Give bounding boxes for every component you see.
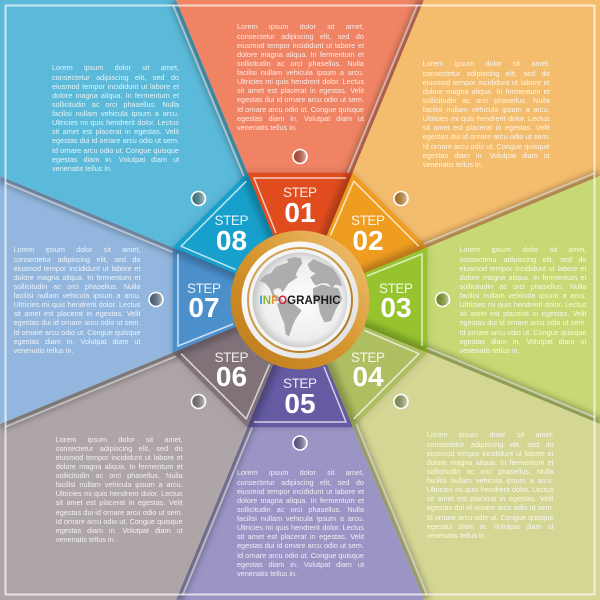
panel: bottom wedge text panel: [176, 364, 424, 600]
panel: bottom wedge text panel: Lorem ipsum dolor sit amet,: [237, 468, 364, 477]
panel: upper right wedge text panel: Ultricies mi quis hendrerit dolor. Lectus: [423, 114, 550, 123]
panel: right wedge text panel: Id ornare arcu odio ut. Congue quisque: [460, 328, 586, 337]
panel: left wedge text panel: consectetur adipiscing elit, sed do: [14, 255, 140, 264]
panel: upper left wedge text panel: sollicitudin ac orci phasellus. Nulla: [52, 100, 179, 109]
step 02 wedge: [326, 172, 428, 274]
panel: lower left wedge text panel: egestas diam in. Volutpat diam ut: [56, 526, 183, 535]
panel: lower right wedge text panel: Ultricies mi quis hendrerit dolor. Lectus: [427, 485, 554, 494]
panel: upper left wedge text panel: Ultricies mi quis hendrerit dolor. Lectus: [52, 118, 179, 127]
panel: lower left wedge text panel: eiusmod tempor incididunt ut labore et: [56, 453, 183, 462]
panel: lower right wedge text panel: venenatis tellus in.: [427, 531, 487, 540]
panel: top wedge text panel: [176, 0, 424, 236]
panel: lower right wedge text panel: egestas dui id ornare arcu odio ut sem.: [427, 503, 554, 512]
step 01 wedge: [247, 172, 353, 236]
panel: lower left wedge text panel: dolore magna aliqua. In fermentum et: [56, 462, 183, 471]
dot: step 01: [293, 150, 307, 164]
panel: left wedge text panel: sit amet est placerat in egestas. Velit: [14, 309, 140, 318]
panel: bottom wedge text panel: facilisi nullam vehicula ipsum a arcu.: [237, 514, 364, 523]
central globe badge: [230, 230, 370, 370]
step 05 wedge: STEP: [283, 376, 317, 391]
panel: lower left wedge text panel: sollicitudin ac orci phasellus. Nulla: [56, 471, 183, 480]
step 04 wedge: [326, 326, 427, 427]
panel: left wedge text panel: dolore magna aliqua. In fermentum et: [14, 273, 140, 282]
panel: top wedge text panel: sit amet est placerat in egestas. Velit: [237, 86, 364, 95]
step 02 wedge: STEP: [351, 213, 385, 228]
panel: right wedge text panel: sollicitudin ac orci phasellus. Nulla: [460, 282, 586, 291]
panel: right wedge text panel: sit amet est placerat in egestas. Velit: [460, 309, 586, 318]
panel: bottom wedge text panel: sit amet est placerat in egestas. Velit: [237, 532, 364, 541]
step 01 wedge: STEP: [283, 185, 317, 200]
connector dots: [149, 150, 450, 450]
panel: left wedge text panel: eiusmod tempor incididunt ut labore et: [14, 264, 140, 273]
step 07 wedge: [172, 247, 236, 353]
panel: upper left wedge text panel: egestas diam in. Volutpat diam ut: [52, 155, 179, 164]
panel: left wedge text panel: Ultricies mi quis hendrerit dolor. Lectus: [14, 300, 140, 309]
dot: step 04: [394, 394, 408, 408]
step 07 wedge: STEP: [187, 281, 221, 296]
panel: lower right wedge text panel: facilisi nullam vehicula ipsum a arcu.: [427, 476, 554, 485]
panel: lower left wedge text panel: facilisi nullam vehicula ipsum a arcu.: [56, 480, 183, 489]
panel: lower right wedge text panel: sit amet est placerat in egestas. Velit: [427, 494, 554, 503]
panel: left wedge text panel: venenatis tellus in.: [14, 346, 74, 355]
dot: step 07: [149, 292, 163, 306]
panel: lower right wedge text panel: Id ornare arcu odio ut. Congue quisque: [427, 513, 554, 522]
panel: left wedge text panel: facilisi nullam vehicula ipsum a arcu.: [14, 291, 140, 300]
panel: right wedge text panel: consectetur adipiscing elit, sed do: [460, 255, 586, 264]
step 07 wedge: 07: [188, 292, 220, 323]
step 06 wedge: [174, 326, 274, 427]
panel: upper left wedge text panel: consectetur adipiscing elit, sed do: [52, 73, 179, 82]
panel: lower right wedge text panel: dolore magna aliqua. In fermentum et: [427, 458, 554, 467]
panel: upper right wedge text panel: Id ornare arcu odio ut. Congue quisque: [423, 142, 550, 151]
panel: lower left wedge text panel: sit amet est placerat in egestas. Velit: [56, 498, 183, 507]
panel: lower left wedge text panel: Lorem ipsum dolor sit amet,: [56, 434, 183, 444]
step 08 wedge: STEP: [214, 213, 248, 228]
step 04 wedge: 04: [352, 361, 384, 392]
dot: step 08: [192, 192, 206, 206]
panel: top wedge text panel: egestas diam in. Volutpat diam ut: [237, 114, 364, 123]
panel: lower left wedge text panel: Id ornare arcu odio ut. Congue quisque: [56, 517, 183, 526]
panel: top wedge text panel: Id ornare arcu odio ut. Congue quisque: [237, 105, 364, 114]
panel: upper right wedge text panel: facilisi nullam vehicula ipsum a arcu.: [423, 105, 550, 114]
panel: upper right wedge text panel: eiusmod tempor incididunt ut labore et: [423, 78, 550, 87]
dot: step 06: [192, 394, 206, 408]
panel: upper left wedge text panel: Id ornare arcu odio ut. Congue quisque: [52, 146, 179, 155]
panel: right wedge text panel: dolore magna aliqua. In fermentum et: [460, 273, 586, 282]
panel: right wedge text panel: egestas diam in. Volutpat diam ut: [460, 337, 586, 346]
panel: top wedge text panel: venenatis tellus in.: [237, 123, 297, 132]
panel: right wedge text panel: eiusmod tempor incididunt ut labore et: [460, 264, 586, 273]
panel: upper right wedge text panel: egestas dui id ornare arcu odio ut sem.: [423, 132, 550, 141]
panel: left wedge text panel: Id ornare arcu odio ut. Congue quisque: [14, 328, 140, 337]
panel: right wedge text panel: Ultricies mi quis hendrerit dolor. Lectus: [460, 300, 586, 309]
panel: left wedge text panel: egestas diam in. Volutpat diam ut: [14, 337, 140, 346]
panel: lower left wedge text panel: venenatis tellus in.: [56, 535, 116, 544]
panel: right wedge text panel: venenatis tellus in.: [460, 346, 520, 355]
badge title: INFOGRAPHIC: [260, 295, 340, 307]
step 01 wedge: 01: [284, 197, 316, 228]
panel: bottom wedge text panel: eiusmod tempor incididunt ut labore et: [237, 487, 364, 496]
panel: lower right wedge text panel: consectetur adipiscing elit, sed do: [427, 440, 554, 449]
panel: upper right wedge text panel: egestas diam in. Volutpat diam ut: [423, 151, 550, 160]
step 05 wedge: [247, 364, 353, 428]
panel: bottom wedge text panel: venenatis tellus in.: [237, 569, 297, 578]
step 03 wedge: STEP: [379, 281, 413, 296]
panel: bottom wedge text panel: Id ornare arcu odio ut. Congue quisque: [237, 551, 364, 560]
panel: top wedge text panel: Lorem ipsum dolor sit amet,: [237, 22, 364, 31]
panel: bottom wedge text panel: egestas diam in. Volutpat diam ut: [237, 560, 364, 569]
panel: top wedge text panel: eiusmod tempor incididunt ut labore et: [237, 41, 364, 50]
panel: upper left wedge text panel: [0, 0, 274, 274]
panel: left wedge text panel: [0, 176, 236, 424]
panel: upper right wedge text panel: venenatis tellus in.: [423, 160, 483, 169]
panel: right wedge text panel: facilisi nullam vehicula ipsum a arcu.: [460, 291, 586, 300]
panel: upper left wedge text panel: eiusmod tempor incididunt ut labore et: [52, 82, 179, 91]
panel: left wedge text panel: egestas dui id ornare arcu odio ut sem.: [14, 318, 140, 327]
panel: right wedge text panel: Lorem ipsum dolor sit amet,: [460, 245, 586, 254]
dot: step 05: [293, 436, 307, 450]
step 03 wedge: 03: [380, 292, 412, 323]
panel: lower right wedge text panel: Lorem ipsum dolor sit amet,: [427, 430, 554, 439]
panel: upper right wedge text panel: consectetur adipiscing elit, sed do: [423, 69, 550, 78]
panel: bottom wedge text panel: dolore magna aliqua. In fermentum et: [237, 496, 364, 505]
panel: left wedge text panel: sollicitudin ac orci phasellus. Nulla: [14, 282, 140, 291]
panel: lower left wedge text panel: consectetur adipiscing elit, sed do: [56, 444, 183, 453]
panel: bottom wedge text panel: consectetur adipiscing elit, sed do: [237, 478, 364, 487]
panel: right wedge text panel: egestas dui id ornare arcu odio ut sem.: [460, 318, 586, 327]
panel: lower left wedge text panel: [0, 327, 272, 600]
panel: upper right wedge text panel: sollicitudin ac orci phasellus. Nulla: [423, 96, 550, 105]
panel: bottom wedge text panel: Ultricies mi quis hendrerit dolor. Lectus: [237, 523, 364, 532]
panel: upper left wedge text panel: venenatis tellus in.: [52, 164, 112, 173]
panel: top wedge text panel: facilisi nullam vehicula ipsum a arcu.: [237, 68, 364, 77]
step 03 wedge: [364, 247, 428, 353]
panel: lower right wedge text panel: egestas diam in. Volutpat diam ut: [427, 522, 554, 531]
panel: upper left wedge text panel: Lorem ipsum dolor sit amet,: [52, 63, 179, 72]
panel: lower left wedge text panel: egestas dui id ornare arcu odio ut sem.: [56, 508, 183, 516]
step 02 wedge: 02: [352, 225, 384, 256]
panel: lower left wedge text panel: Ultricies mi quis hendrerit dolor. Lectus: [56, 489, 183, 498]
step 06 wedge: 06: [216, 361, 247, 392]
panel: upper left wedge text panel: facilisi nullam vehicula ipsum a arcu.: [52, 109, 179, 118]
panel: upper right wedge text panel: Lorem ipsum dolor sit amet,: [423, 59, 550, 68]
panel: upper left wedge text panel: dolore magna aliqua. In fermentum et: [52, 91, 179, 100]
step 06 wedge: STEP: [214, 350, 248, 365]
panel: top wedge text panel: dolore magna aliqua. In fermentum et: [237, 50, 364, 59]
panel: lower right wedge text panel: sollicitudin ac orci phasellus. Nulla: [427, 467, 554, 476]
panel: top wedge text panel: Ultricies mi quis hendrerit dolor. Lectus: [237, 77, 364, 86]
panel: upper right wedge text panel: sit amet est placerat in egestas. Velit: [423, 123, 550, 132]
step 08 wedge: [172, 172, 274, 274]
icon: world map continents: [260, 257, 342, 336]
panel: bottom wedge text panel: egestas dui id ornare arcu odio ut sem.: [237, 541, 364, 550]
dot: step 02: [394, 192, 408, 206]
panel: upper right wedge text panel: [326, 0, 600, 274]
panel: left wedge text panel: Lorem ipsum dolor sit amet,: [14, 245, 140, 254]
panel: upper left wedge text panel: sit amet est placerat in egestas. Velit: [52, 127, 179, 136]
panel: lower right wedge text panel: eiusmod tempor incididunt ut labore et: [427, 449, 554, 458]
panel: bottom wedge text panel: sollicitudin ac orci phasellus. Nulla: [237, 505, 364, 514]
panel: top wedge text panel: egestas dui id ornare arcu odio ut sem.: [237, 95, 364, 104]
panel: upper left wedge text panel: egestas dui id ornare arcu odio ut sem.: [52, 136, 179, 145]
dot: step 03: [436, 292, 450, 306]
step 08 wedge: 08: [216, 225, 247, 256]
panel: top wedge text panel: sollicitudin ac orci phasellus. Nulla: [237, 59, 364, 68]
step 05 wedge: 05: [284, 388, 316, 419]
panel: right wedge text panel: [382, 176, 600, 424]
panel: top wedge text panel: consectetur adipiscing elit, sed do: [237, 32, 364, 41]
panel: lower right wedge text panel: [326, 328, 600, 600]
panel: upper right wedge text panel: dolore magna aliqua. In fermentum et: [423, 87, 550, 96]
step 04 wedge: STEP: [351, 350, 385, 365]
